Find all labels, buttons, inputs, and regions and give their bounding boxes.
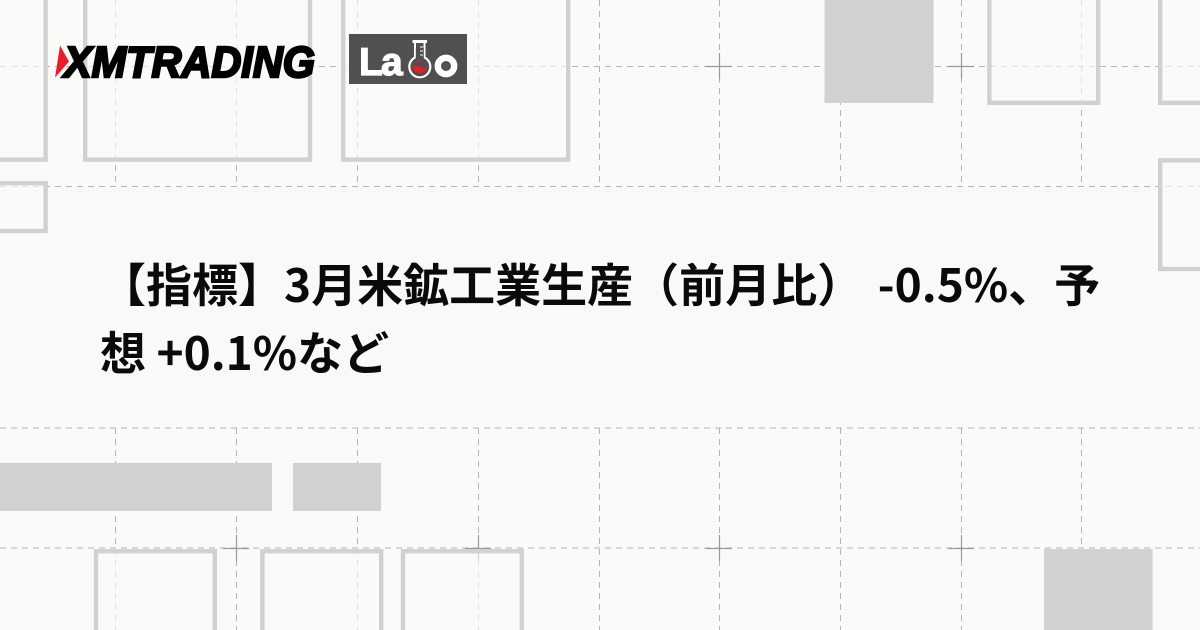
logo: Labo bbox=[349, 34, 467, 84]
logo: Labo: L bbox=[359, 41, 383, 84]
logo: XMTRADING: XMTRADING bbox=[62, 39, 315, 87]
logo: Labo: a bbox=[381, 41, 403, 84]
crosshair markers bbox=[223, 53, 974, 561]
title: 【指標】3月米鉱工業生産（前月比） -0.5%、予 bbox=[100, 250, 1100, 316]
title panel bbox=[52, 188, 1150, 425]
icon: flask bbox=[409, 40, 430, 77]
title: 想 +0.1%など bbox=[100, 318, 389, 384]
title bbox=[100, 250, 1100, 384]
